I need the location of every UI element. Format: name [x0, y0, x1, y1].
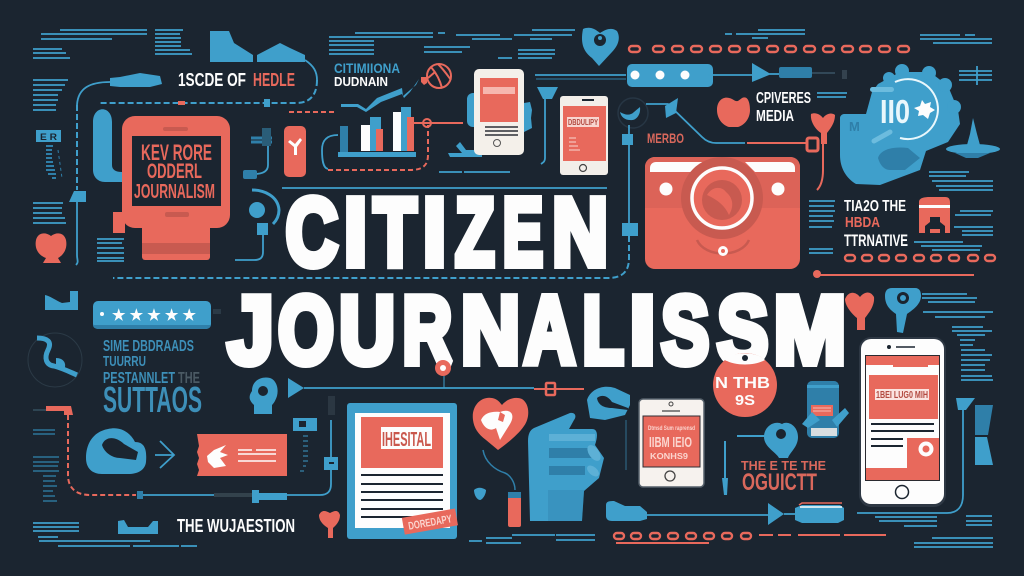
- text lines: phone top: [514, 30, 575, 58]
- heading: top left label: HEDLE: [253, 70, 295, 90]
- bar chart: [322, 79, 463, 170]
- text: converes media: MEDIA: [756, 108, 794, 125]
- text: sutaos block: [103, 338, 202, 420]
- text: sutaos block: PESTANNLET: [103, 370, 175, 387]
- stamp: DOREDAPY: [407, 513, 453, 533]
- icon: small coral heart: [319, 511, 340, 538]
- icon: plug socket: [243, 128, 272, 179]
- phone: second: [560, 96, 608, 175]
- icon: coral round ball: [421, 64, 451, 88]
- icon: coral heart: [36, 233, 66, 263]
- small box label: [36, 130, 62, 178]
- icon: bow: [975, 405, 993, 465]
- coral chain: top: [629, 46, 909, 52]
- title: journalissm: A: [524, 277, 575, 384]
- icon: bird circle: [618, 98, 648, 128]
- title: citizen: Z: [455, 179, 494, 286]
- text: the e te the oguictt: THE E TE THE: [741, 458, 826, 473]
- heading: chart label: [334, 60, 400, 89]
- icon: blue hand with badge: M: [849, 119, 860, 134]
- phone: third: Dtmsd Sum raprensd: [648, 426, 695, 432]
- text lines: bottom right: [875, 516, 993, 547]
- title: journalissm: L: [582, 277, 624, 384]
- title: citizen: I: [423, 179, 446, 286]
- panel: document: IHESITAL: [382, 429, 431, 451]
- title: journalissm: N: [461, 277, 520, 384]
- icon: coral block: [284, 126, 306, 177]
- panel: coral tablet: [93, 109, 230, 260]
- title: journalissm: I: [630, 277, 655, 384]
- title: citizen: C: [286, 179, 338, 286]
- text: tia2o the hbda trnative: TIA2O THE: [844, 198, 906, 215]
- text: the e te the oguictt: OGUICTT: [742, 469, 817, 496]
- coral chain: bottom: [614, 533, 751, 539]
- phone: third: [639, 399, 704, 487]
- text: sutaos block: TUURRU: [103, 353, 146, 370]
- icon: blue hand with badge: II0: [880, 93, 910, 130]
- icon: blue hand with badge: [840, 64, 961, 185]
- heading: bottom label: THE WUJAESTION: [177, 516, 295, 536]
- text lines: bottom left: [33, 523, 197, 546]
- pill connector with dots: [627, 63, 847, 87]
- divider above title: [282, 187, 607, 189]
- icon: lamp: [946, 118, 1000, 158]
- panel: star rating bar: ★ ★ ★ ★ ★: [112, 307, 196, 324]
- connector: arrow to node: [646, 98, 835, 190]
- title: journalissm: S: [661, 277, 709, 384]
- text lines: right lower: [922, 294, 993, 380]
- text: sutaos block: THE: [178, 370, 200, 387]
- tablet text: ODDERL: [147, 160, 202, 183]
- text lines: left middle: [33, 203, 124, 261]
- title: citizen: I: [344, 179, 367, 286]
- badge: coral circle: N THB: [715, 375, 770, 392]
- connector: top loop: [99, 60, 317, 107]
- coral dashes: [289, 111, 335, 113]
- icon: small blue heart: [474, 488, 486, 500]
- coral chain: right: [845, 255, 995, 261]
- text: the e te the oguictt: [741, 458, 826, 496]
- panel: coral camera: [645, 157, 800, 269]
- icon: coral hat: [919, 197, 950, 233]
- connector: coral dashed to blue: [33, 396, 338, 503]
- pin: play: [250, 360, 584, 414]
- icon: swoosh dial: [28, 333, 82, 387]
- text: tia2o the hbda trnative: HBDA: [845, 214, 880, 231]
- label: mereo: MERBO: [647, 130, 684, 146]
- coral line with dot: [813, 270, 974, 278]
- panel: star rating bar: [93, 301, 221, 329]
- title: journalissm: O: [278, 277, 334, 384]
- icon: blue blob: [587, 387, 630, 470]
- phone: large: 1BEI LUG0 MIH: [876, 390, 928, 401]
- title: citizen: N: [552, 179, 608, 286]
- connector: right l-line: [857, 398, 975, 513]
- icon: shoes: [210, 31, 305, 62]
- heading: chart label: CITIMIIONA: [334, 60, 400, 76]
- title: journalissm: S: [717, 277, 768, 384]
- icon: heart pin lower: [737, 423, 798, 458]
- panel: document: [347, 403, 458, 539]
- tablet text: [134, 140, 215, 203]
- badge: coral circle: 9S: [735, 392, 755, 409]
- phone: third: IIBM IEIO: [649, 434, 692, 451]
- icon: box and lines: [293, 418, 317, 471]
- text lines: lower left: [33, 430, 59, 501]
- icon: small left shape: [45, 291, 78, 310]
- icon: coral organ: [717, 97, 750, 127]
- text: tia2o the hbda trnative: [844, 198, 908, 250]
- text: converes media: [756, 90, 847, 125]
- connector: capsule arrow: [606, 501, 844, 525]
- icon: plus lines: [959, 66, 992, 85]
- arrow: [155, 441, 174, 468]
- pin stem: [722, 441, 728, 495]
- connector: plug and left line: [69, 73, 162, 265]
- heading: chart label: DUDNAIN: [334, 74, 388, 89]
- phone: second: DBDULIPY: [568, 118, 598, 127]
- icon: blue ring pin: [885, 288, 921, 333]
- text lines: bottom centre: [469, 535, 595, 543]
- badge: coral circle: [713, 348, 777, 417]
- coral ticket: [197, 434, 287, 476]
- text lines: right middle: [809, 172, 993, 253]
- title: citizen: T: [374, 179, 416, 286]
- title: journalissm: J: [228, 277, 274, 384]
- title: citizen: E: [503, 179, 543, 286]
- text: sutaos block: SIME DBDRAADS: [103, 338, 194, 355]
- text lines: top centre: [329, 33, 512, 58]
- icon: lightbulb: [235, 190, 279, 260]
- icon: heart with tube: [473, 398, 528, 527]
- small box label: E R: [40, 132, 58, 142]
- coral lines: [616, 535, 886, 543]
- text lines: top left: [33, 30, 192, 110]
- icon: cloud blob: [86, 428, 146, 474]
- phone: first hand-held: [439, 69, 532, 172]
- icon: coral heart upper right: [845, 292, 874, 330]
- title: journalissm: R: [402, 277, 452, 384]
- text: converes media: CPIVERES: [756, 90, 811, 107]
- title: journalissm: U: [339, 277, 395, 384]
- connector: long vertical: [113, 125, 638, 278]
- phone: large: [859, 337, 946, 507]
- tablet text: JOURNALISM: [134, 181, 215, 203]
- heading: top left label: 1SCDE OF: [178, 70, 246, 90]
- phone: third: KONHS9: [650, 452, 689, 461]
- text lines: top right: [725, 30, 992, 43]
- icon: blue hand: [528, 413, 604, 521]
- icon: heart pin: [582, 28, 619, 66]
- icon: sofa: [118, 520, 158, 534]
- text: sutaos block: SUTTAOS: [103, 379, 202, 420]
- icon: small phone with hand: [802, 381, 849, 438]
- connector: funnel: [535, 75, 626, 164]
- text: tia2o the hbda trnative: TTRNATIVE: [844, 231, 908, 250]
- tablet text: KEV RORE: [141, 140, 212, 165]
- title: journalissm: M: [774, 277, 846, 384]
